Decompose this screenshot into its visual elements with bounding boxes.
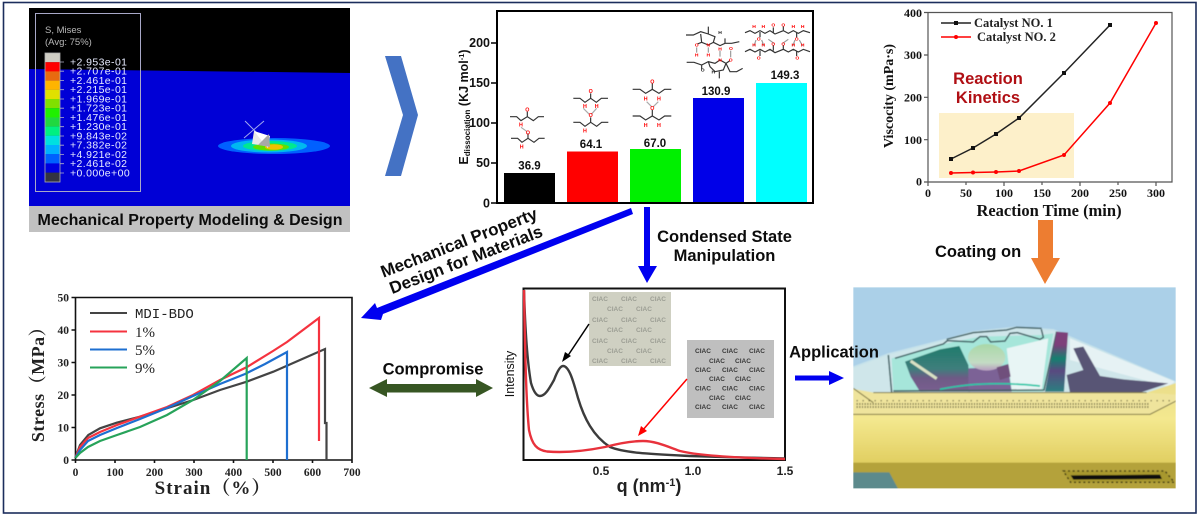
y axis tick labels: 150 <box>469 76 490 90</box>
molecular structures: ureidopyrimidinone dimer and urea sheet: H <box>801 43 805 49</box>
inset: hazy film sample: CIAC <box>592 296 608 303</box>
stress contour legend: +1.969e-01 <box>70 94 127 106</box>
pilot body <box>968 367 1012 392</box>
inset: clear film sample: CIAC <box>749 404 765 411</box>
panel: dissociation energy bar chart <box>457 11 813 210</box>
label: mechanical property design for materials: Design for Materials <box>387 222 545 298</box>
pilot seat <box>905 346 970 392</box>
label: compromise: Compromise <box>383 360 483 378</box>
stress contour legend: S, Mises <box>45 25 82 36</box>
stress contour legend <box>36 14 140 192</box>
catalyst 2 line <box>949 21 1158 175</box>
molecular structures: ureidopyrimidinone dimer and urea sheet: H <box>792 43 796 49</box>
cockpit interior glow <box>892 333 1053 392</box>
inset: hazy film sample: CIAC <box>592 358 608 365</box>
reaction kinetics heading: Reaction <box>953 70 1023 88</box>
canopy glass <box>850 327 1180 395</box>
stress tick labels: 30 <box>58 358 69 370</box>
inset: clear film sample: CIAC <box>735 358 751 365</box>
molecular structures: ureidopyrimidinone dimer and urea sheet: O <box>701 68 705 74</box>
molecular structures: ureidopyrimidinone dimer and urea sheet: O <box>781 41 785 47</box>
curve: 5 percent <box>75 352 287 460</box>
label: condensed state manipulation: Manipulation <box>674 247 775 265</box>
arrow: compromise double <box>369 379 493 397</box>
stress contour around indenter <box>218 121 330 154</box>
molecular structures: ureidopyrimidinone dimer and urea sheet: H <box>712 69 716 75</box>
stress contour legend: +2.953e-01 <box>70 56 127 68</box>
viscosity tick labels: 100 <box>904 133 922 147</box>
stress legend: 9% <box>135 361 155 377</box>
molecular structures: ureidopyrimidinone dimer and urea sheet: H <box>718 30 722 36</box>
catalyst legend: Catalyst NO. 2 <box>977 30 1056 44</box>
viscosity tick labels: 100 <box>995 186 1013 200</box>
curve: red scattering <box>524 290 785 459</box>
molecular structures: ureidopyrimidinone dimer and urea sheet: O <box>729 46 733 52</box>
inset: clear film sample: CIAC <box>695 367 711 374</box>
inset: hazy film sample: CIAC <box>592 317 608 324</box>
vent grille <box>1063 471 1174 482</box>
panel: viscosity kinetics chart <box>882 6 1172 220</box>
lower fuselage <box>853 462 1176 488</box>
inset: clear film sample: CIAC <box>695 404 711 411</box>
arrow: application <box>795 371 844 385</box>
pilot hand <box>1067 347 1168 393</box>
inset: clear film sample: CIAC <box>709 358 725 365</box>
photo: coated aircraft canopy <box>850 284 1180 493</box>
catalyst legend: Catalyst NO. 1 <box>974 16 1053 30</box>
stress legend <box>90 307 194 377</box>
stress contour legend: +1.230e-01 <box>70 121 127 133</box>
label: coating on: Coating on <box>935 243 1021 261</box>
molecular structures: urethane and urea pairs <box>510 79 671 151</box>
label: application: Application <box>789 344 879 362</box>
viscosity axis titles: Reaction Time (min) <box>976 201 1122 220</box>
caption: modeling and design: Mechanical Property Modeling & Design <box>38 212 342 229</box>
inset: hazy film sample: CIAC <box>607 327 623 334</box>
stress contour legend: +2.215e-01 <box>70 84 127 96</box>
inset: hazy film sample: CIAC <box>636 348 652 355</box>
inset: clear film sample <box>687 340 774 418</box>
y axis tick labels: 0 <box>483 196 490 210</box>
stress tick labels: 700 <box>343 467 361 479</box>
inset: hazy film sample: CIAC <box>621 296 637 303</box>
inset: hazy film sample: CIAC <box>636 306 652 313</box>
highlight box <box>939 113 1074 178</box>
viscosity tick labels <box>904 6 1165 200</box>
reflection behind pilot <box>1007 338 1048 390</box>
inset: clear film sample: CIAC <box>735 395 751 402</box>
stress contour legend: +2.461e-02 <box>70 158 127 170</box>
molecular structures: ureidopyrimidinone dimer and urea sheet: N <box>718 58 722 64</box>
bar values: 36.9 <box>518 160 541 172</box>
viscosity tick labels: 0 <box>925 186 931 200</box>
arrow: mechanical property design <box>361 208 633 320</box>
scattering x ticks: 0.5 <box>593 464 610 478</box>
arrow: condensed state <box>638 207 657 283</box>
inset: clear film sample: CIAC <box>709 376 725 383</box>
molecular structures: urethane and urea pairs: H <box>644 96 648 102</box>
inset: hazy film sample <box>589 292 671 366</box>
catalyst legend <box>941 16 1056 44</box>
curve: 9 percent <box>75 358 247 460</box>
y axis tick labels <box>469 36 490 210</box>
simulation background <box>29 8 350 206</box>
label: mechanical property design for materials: Mechanical Property <box>378 204 541 282</box>
inset: clear film sample: CIAC <box>695 348 711 355</box>
molecular structures: ureidopyrimidinone dimer and urea sheet: H <box>762 24 766 30</box>
pilot helmet <box>968 344 1005 371</box>
inset: hazy film sample: CIAC <box>607 306 623 313</box>
reaction kinetics heading <box>953 70 1023 107</box>
molecular structures: urethane and urea pairs: H <box>657 123 661 129</box>
stress tick labels: 600 <box>304 467 321 479</box>
viscosity tick labels: 200 <box>1071 186 1089 200</box>
panel: scattering intensity chart <box>503 288 794 496</box>
inset: clear film sample: CIAC <box>749 386 765 392</box>
inset: clear film sample: CIAC <box>722 386 738 392</box>
chart frame <box>72 298 352 463</box>
cockpit pillar <box>1045 332 1068 392</box>
stress tick labels: 200 <box>146 467 163 479</box>
viscosity tick labels: 300 <box>904 48 922 62</box>
molecular structures: ureidopyrimidinone dimer and urea sheet: O <box>757 55 761 61</box>
molecular structures: ureidopyrimidinone dimer and urea sheet: O <box>781 23 785 29</box>
label: condensed state manipulation: Condensed State <box>657 228 792 246</box>
inset: clear film sample: CIAC <box>709 395 725 402</box>
stress tick labels: 20 <box>58 390 69 402</box>
oxygen mask <box>997 364 1011 380</box>
arrow: red peak pointer <box>638 379 687 436</box>
stress tick labels: 50 <box>58 292 69 304</box>
molecular structures: urethane and urea pairs: O <box>650 106 654 112</box>
molecular structures: urethane and urea pairs: O <box>589 89 593 95</box>
molecular structures: ureidopyrimidinone dimer and urea sheet: H <box>752 43 756 49</box>
arrow: chevron to bar chart <box>385 56 418 176</box>
label: condensed state manipulation <box>657 228 792 265</box>
stress contour legend: +1.476e-01 <box>70 112 127 124</box>
molecular structures: urethane and urea pairs: O <box>589 113 593 119</box>
teal reflection arc <box>940 384 1040 389</box>
bar values: 64.1 <box>580 139 603 151</box>
y axis tick labels: 50 <box>476 156 490 170</box>
molecular structures: ureidopyrimidinone dimer and urea sheet: H <box>707 53 711 59</box>
panel: stress strain chart <box>28 292 361 499</box>
stress legend: 1% <box>135 325 155 341</box>
molecular structures: ureidopyrimidinone dimer and urea sheet: H <box>695 53 699 59</box>
arrow: black peak pointer <box>562 324 589 362</box>
stress tick labels: 500 <box>264 467 282 479</box>
molecular structures: urethane and urea pairs: H <box>583 128 587 134</box>
molecular structures: ureidopyrimidinone dimer and urea sheet: N <box>707 43 711 49</box>
stress contour legend: (Avg: 75%) <box>45 37 92 48</box>
fuselage <box>850 382 1180 464</box>
molecular structures: urethane and urea pairs: O <box>650 79 654 85</box>
stress contour legend: +2.461e-01 <box>70 75 127 87</box>
bar values: 130.9 <box>702 86 730 98</box>
stress axis titles: Strain（%） <box>155 477 271 499</box>
bars <box>504 83 807 203</box>
viscosity tick labels: 250 <box>1109 186 1127 200</box>
molecular structures: urethane and urea pairs: H <box>595 104 599 110</box>
stress tick labels: 40 <box>58 325 69 337</box>
viscosity tick labels: 400 <box>904 6 922 20</box>
molecular structures: urethane and urea pairs: H <box>583 104 587 110</box>
y axis title: (KJ mol <box>457 60 471 110</box>
bar values: 149.3 <box>771 70 799 82</box>
inset: hazy film sample: CIAC <box>621 317 637 324</box>
bar values <box>518 70 799 172</box>
y axis tick labels: 200 <box>469 36 490 50</box>
inset: clear film sample: CIAC <box>695 386 711 392</box>
canopy frame <box>888 327 1057 393</box>
stress tick labels: 300 <box>185 467 203 479</box>
molecular structures: urethane and urea pairs: O <box>526 130 530 136</box>
molecular structures: ureidopyrimidinone dimer and urea sheet: O <box>729 58 733 64</box>
arrow: coating down <box>1031 220 1060 284</box>
molecular structures: ureidopyrimidinone dimer and urea sheet: O <box>771 41 775 47</box>
inset: clear film sample: CIAC <box>749 367 765 374</box>
y axis title: Intensity <box>503 350 517 397</box>
chart frame <box>924 12 1172 186</box>
molecular structures: ureidopyrimidinone dimer and urea sheet: O <box>771 23 775 29</box>
x axis title: ) <box>675 476 681 496</box>
curve: 1 percent <box>75 318 319 458</box>
inset: hazy film sample: CIAC <box>650 317 666 324</box>
stress tick labels: 400 <box>225 467 242 479</box>
viscosity axis titles: Viscocity (mPa·s) <box>882 44 897 148</box>
molecular structures: urethane and urea pairs: H <box>519 123 523 129</box>
inset: hazy film sample: CIAC <box>621 338 637 345</box>
viscosity axis titles <box>882 44 1122 220</box>
inset: hazy film sample: CIAC <box>621 358 637 365</box>
inset: clear film sample: CIAC <box>722 367 738 374</box>
inset: clear film sample: CIAC <box>722 348 738 355</box>
inset: hazy film sample: CIAC <box>650 358 666 365</box>
chart frame <box>524 288 785 460</box>
inset: hazy film sample: CIAC <box>592 338 608 345</box>
inset: clear film sample: CIAC <box>722 404 738 411</box>
molecular structures: urethane and urea pairs: H <box>520 145 524 151</box>
scattering x ticks: 1.5 <box>777 464 794 478</box>
molecular structures: ureidopyrimidinone dimer and urea sheet: O <box>795 37 799 43</box>
molecular structures: ureidopyrimidinone dimer and urea sheet: O <box>757 37 761 43</box>
panel: mechanical property modeling <box>29 8 350 232</box>
y axis title: -1 <box>457 54 466 60</box>
intake shadow <box>853 472 898 488</box>
y axis title: dissociation <box>463 109 472 156</box>
y axis title: E <box>457 156 471 165</box>
reaction kinetics heading: Kinetics <box>956 89 1020 107</box>
molecular structures: ureidopyrimidinone dimer and urea sheet: H <box>718 47 722 53</box>
viscosity tick labels: 300 <box>1147 186 1165 200</box>
curve: black scattering <box>524 290 785 458</box>
molecular structures: ureidopyrimidinone dimer and urea sheet: H <box>801 24 805 30</box>
inset: hazy film sample: CIAC <box>650 338 666 345</box>
molecular structures: urethane and urea pairs: H <box>657 96 661 102</box>
stress legend: 5% <box>135 343 155 359</box>
sky <box>853 287 1176 382</box>
y axis title: ) <box>457 49 471 54</box>
inset: hazy film sample: CIAC <box>636 327 652 334</box>
seat handle <box>911 361 937 379</box>
scattering x ticks: 1.0 <box>685 464 702 478</box>
inset: hazy film sample: CIAC <box>607 348 623 355</box>
stress tick labels: 10 <box>58 422 69 434</box>
molecular structures: ureidopyrimidinone dimer and urea sheet: H <box>752 24 756 30</box>
caption: modeling and design <box>29 206 350 232</box>
inset: clear film sample: CIAC <box>749 348 765 355</box>
stress tick labels: 0 <box>73 467 79 479</box>
stress legend: MDI-BDO <box>135 307 194 323</box>
stress axis titles: Stress（MPa） <box>28 318 48 442</box>
stress tick labels <box>58 292 361 479</box>
chart frame and ticks <box>491 11 813 203</box>
x axis title: q (nm <box>617 476 666 496</box>
x axis title: -1 <box>666 477 675 489</box>
stress contour legend: +7.382e-02 <box>70 140 127 152</box>
stress tick labels: 0 <box>63 455 69 467</box>
stress contour legend: +0.000e+00 <box>70 168 130 180</box>
viscosity tick labels: 150 <box>1033 186 1051 200</box>
rivet panel <box>850 388 1180 414</box>
stress tick labels: 100 <box>106 467 124 479</box>
viscosity tick labels: 50 <box>960 186 972 200</box>
inset: hazy film sample: CIAC <box>650 296 666 303</box>
scattering x ticks <box>593 464 794 478</box>
stress contour legend: +1.723e-01 <box>70 103 127 115</box>
y axis tick labels: 100 <box>469 116 490 130</box>
molecular structures: ureidopyrimidinone dimer and urea sheet <box>686 23 810 78</box>
molecular structures: urethane and urea pairs: O <box>525 107 529 113</box>
stress contour legend: +9.843e-02 <box>70 130 127 142</box>
molecular structures: ureidopyrimidinone dimer and urea sheet: O <box>795 55 799 61</box>
viscosity tick labels: 0 <box>916 174 922 188</box>
molecular structures: ureidopyrimidinone dimer and urea sheet: O <box>695 43 699 49</box>
viscosity tick labels: 200 <box>904 90 922 104</box>
molecular structures: ureidopyrimidinone dimer and urea sheet: H <box>792 24 796 30</box>
stress contour legend: +4.921e-02 <box>70 149 127 161</box>
molecular structures: urethane and urea pairs: H <box>644 123 648 129</box>
stress contour legend: +2.707e-01 <box>70 66 127 78</box>
curve: MDI-BDO <box>75 349 326 460</box>
right canopy light band <box>1070 338 1175 387</box>
inset: clear film sample: CIAC <box>735 376 751 383</box>
stress axis titles <box>28 318 271 499</box>
catalyst 1 line <box>949 23 1112 161</box>
bar values: 67.0 <box>644 138 666 150</box>
molecular structures: ureidopyrimidinone dimer and urea sheet: H <box>762 43 766 49</box>
